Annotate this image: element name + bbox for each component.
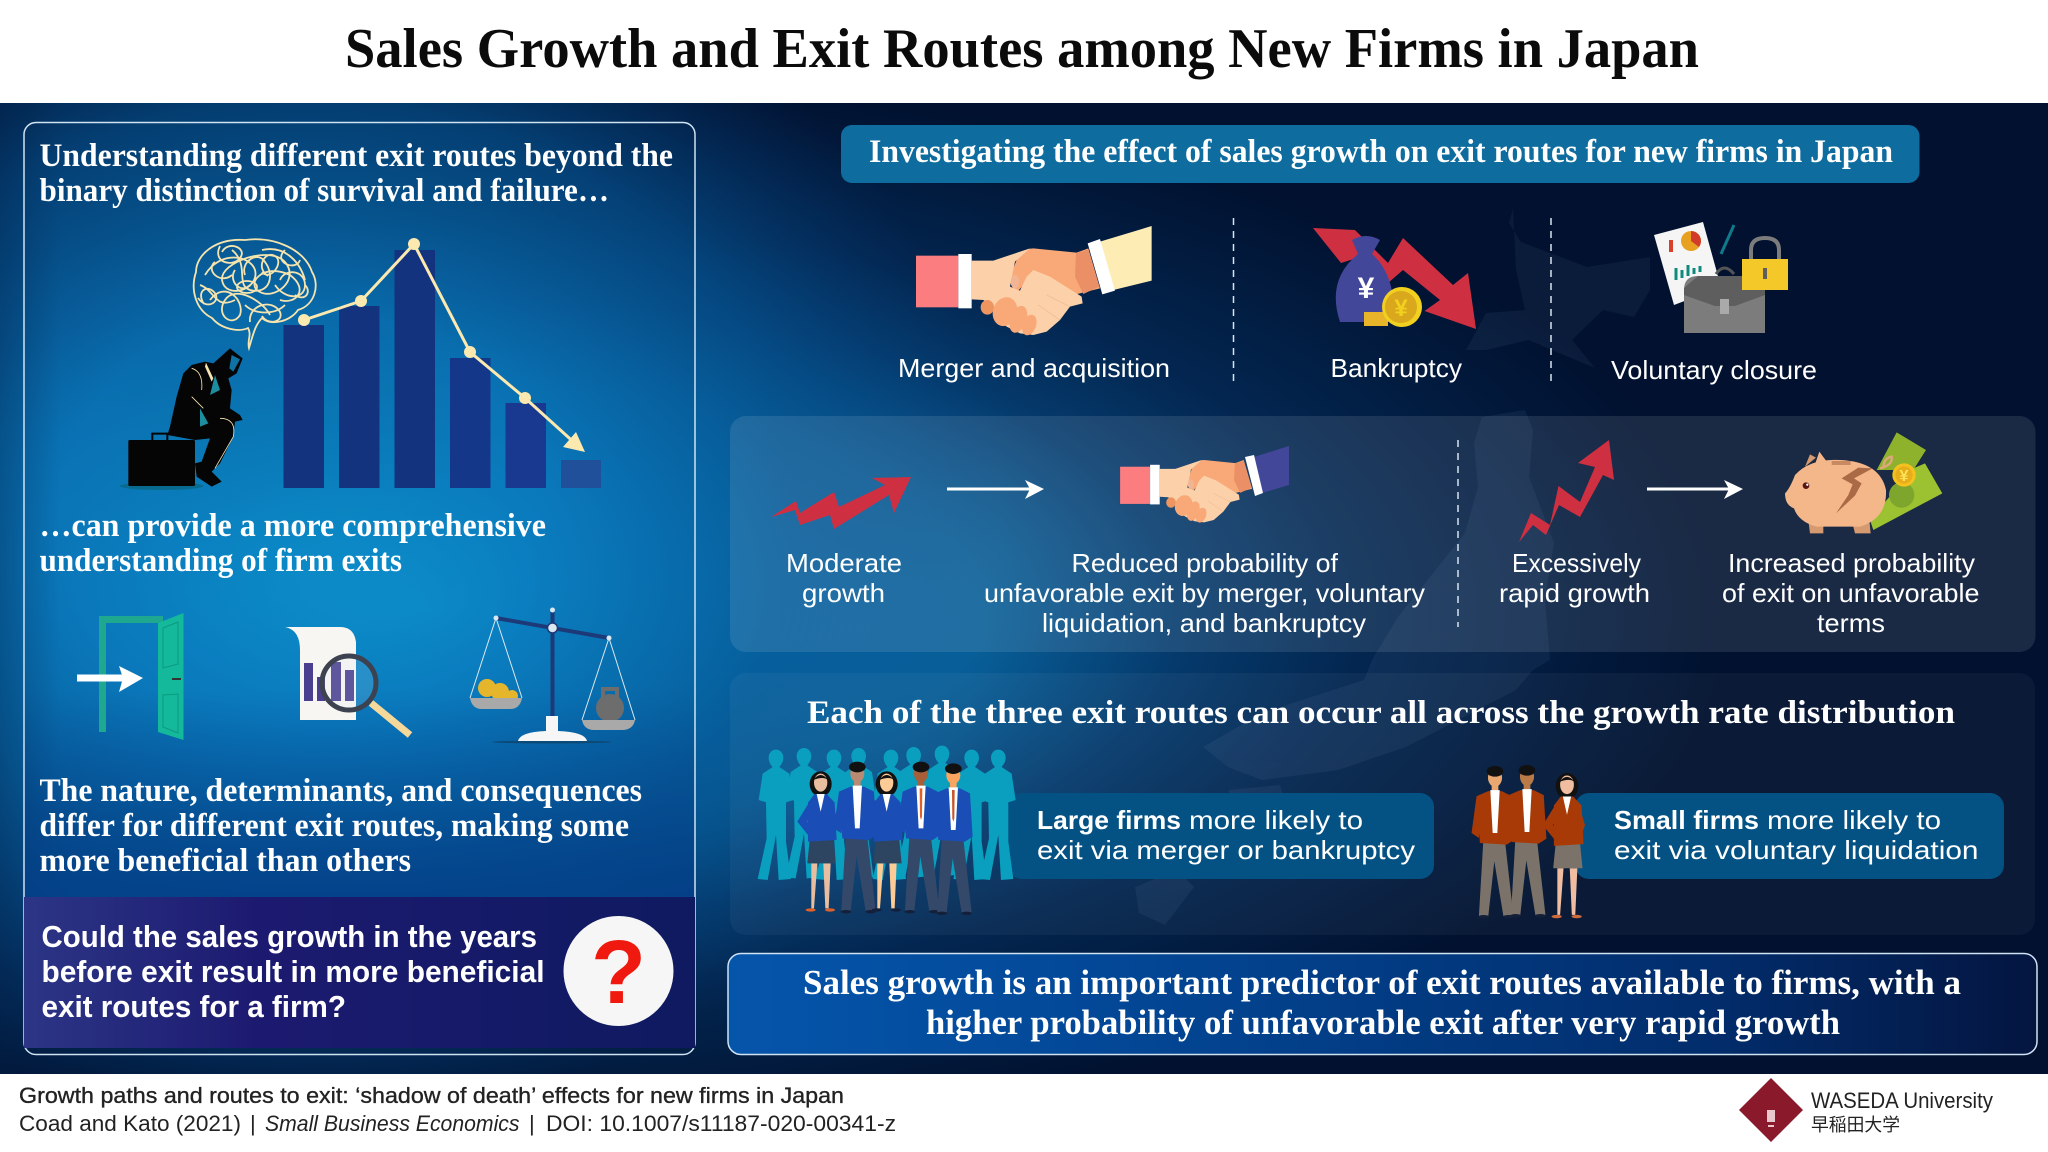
icon: excessive growth arrow <box>1519 440 1614 542</box>
arrow: moderate to reduced <box>947 480 1044 499</box>
icon: handshake merger <box>898 226 1170 383</box>
heading pill: investigating the effect: Investigating the effect of sales growth on exit routes for new firms in Japan <box>869 134 1893 170</box>
icon: bankruptcy money bag: ¥ <box>1358 272 1375 305</box>
logo: Waseda University <box>1739 1078 1993 1142</box>
icon: bankruptcy money bag <box>1313 228 1476 383</box>
pill: small firms <box>1575 793 2004 879</box>
heading: exit routes across growth distribution: Each of the three exit routes can occur all across the growth rate distribution <box>807 695 1955 731</box>
icon: worried businessman on briefcase <box>120 348 243 490</box>
icon: large firm crowd <box>758 746 1016 915</box>
icon: moderate growth arrow <box>771 477 911 529</box>
icon: broken piggy bank <box>1785 432 1942 533</box>
label: excessively rapid growth: Excessively <box>1512 548 1641 578</box>
text: reduced probability: Reduced probability of <box>1072 548 1339 578</box>
label: merger: Merger and acquisition <box>898 353 1170 383</box>
title: Sales Growth and Exit Routes among New Firms in Japan <box>345 18 1699 80</box>
label: moderate growth <box>786 548 902 608</box>
label: moderate growth: growth <box>802 578 885 608</box>
logo: Waseda University: WASEDA University <box>1811 1088 1993 1113</box>
icon: broken piggy bank: ¥ <box>1900 468 1909 485</box>
footer <box>0 1074 2048 1152</box>
pill: large firms: exit via merger or bankruptcy <box>1037 835 1415 865</box>
text: increased probability: of exit on unfavorable <box>1722 578 1980 608</box>
label: excessively rapid growth <box>1499 548 1650 608</box>
text: increased probability <box>1722 548 1980 638</box>
callout: research question <box>24 897 695 1048</box>
icon: question mark <box>564 916 674 1026</box>
heading: exit routes intro: binary distinction of survival and failure… <box>40 173 609 209</box>
arrow: excessive to increased <box>1647 480 1743 499</box>
heading: exit routes intro: Understanding different exit routes beyond the <box>40 138 673 174</box>
label: voluntary closure: Voluntary closure <box>1611 355 1817 385</box>
panel: left context <box>24 122 695 1054</box>
label: moderate growth: Moderate <box>786 548 902 578</box>
icon: balance scale with coins and weight <box>470 608 635 744</box>
question text <box>42 919 544 1024</box>
citation: Coad and Kato (2021) <box>19 1111 241 1136</box>
question text: before exit result in more beneficial <box>42 954 544 989</box>
pill: large firms <box>1008 793 1434 879</box>
citation: | <box>529 1111 535 1136</box>
header band <box>0 0 2048 103</box>
text: nature determinants consequences: more beneficial than others <box>40 843 411 879</box>
icon: handshake reduced probability <box>1120 446 1289 524</box>
text: comprehensive understanding: …can provide a more comprehensive <box>40 508 546 544</box>
text: increased probability: Increased probability <box>1728 548 1975 578</box>
chart: rising and falling bars <box>284 238 601 488</box>
heading: exit routes intro <box>40 138 673 209</box>
label: bankruptcy: Bankruptcy <box>1330 353 1462 383</box>
icon: small firm team <box>1472 765 1585 918</box>
citation: | <box>250 1111 256 1136</box>
question text: exit routes for a firm? <box>42 989 346 1024</box>
panel: growth outcomes <box>730 416 2036 652</box>
pill: large firms: more likely to <box>1189 805 1363 835</box>
text: comprehensive understanding <box>40 508 546 579</box>
icon: tangled brain <box>194 239 316 348</box>
icon: bankruptcy money bag: ¥ <box>1394 295 1408 322</box>
banner: conclusion: higher probability of unfavorable exit after very rapid growth <box>926 1003 1840 1042</box>
citation: Small Business Economics <box>265 1111 520 1136</box>
text: nature determinants consequences: The nature, determinants, and consequences <box>40 773 642 809</box>
map of Japan watermark <box>1135 208 1650 925</box>
icon: open door with arrow <box>77 613 184 740</box>
text: reduced probability <box>984 548 1425 638</box>
panel: firm size <box>730 673 2035 935</box>
citation: Growth paths and routes to exit: ‘shadow of death’ effects for new firms in Japan <box>19 1083 844 1108</box>
text: comprehensive understanding: understanding of firm exits <box>40 543 402 579</box>
pill: small firms: Small firms <box>1614 805 1759 835</box>
question text: Could the sales growth in the years <box>42 919 537 954</box>
text: reduced probability: unfavorable exit by merger, voluntary <box>984 578 1425 608</box>
text: reduced probability: liquidation, and bankruptcy <box>1042 608 1366 638</box>
label: excessively rapid growth: rapid growth <box>1499 578 1650 608</box>
logo: Waseda University: 早稲田大学 <box>1811 1115 1900 1135</box>
citation <box>19 1083 896 1136</box>
text: nature determinants consequences <box>40 773 642 879</box>
icon: voluntary closure briefcase and lock <box>1611 222 1817 385</box>
text: increased probability: terms <box>1817 608 1885 638</box>
row: three exit routes <box>898 218 1817 385</box>
heading pill: investigating the effect <box>841 125 1920 183</box>
icon: report under magnifying glass <box>285 627 410 735</box>
icon: question mark: ? <box>591 923 646 1023</box>
banner: conclusion <box>728 954 2037 1054</box>
banner: conclusion: Sales growth is an important predictor of exit routes available to firms, with a <box>803 963 1961 1002</box>
citation: DOI: 10.1007/s11187-020-00341-z <box>546 1111 896 1136</box>
pill: small firms: exit via voluntary liquidation <box>1614 835 1978 865</box>
text: nature determinants consequences: differ for different exit routes, making some <box>40 808 629 844</box>
pill: small firms: more likely to <box>1767 805 1941 835</box>
pill: large firms: Large firms <box>1037 805 1181 835</box>
